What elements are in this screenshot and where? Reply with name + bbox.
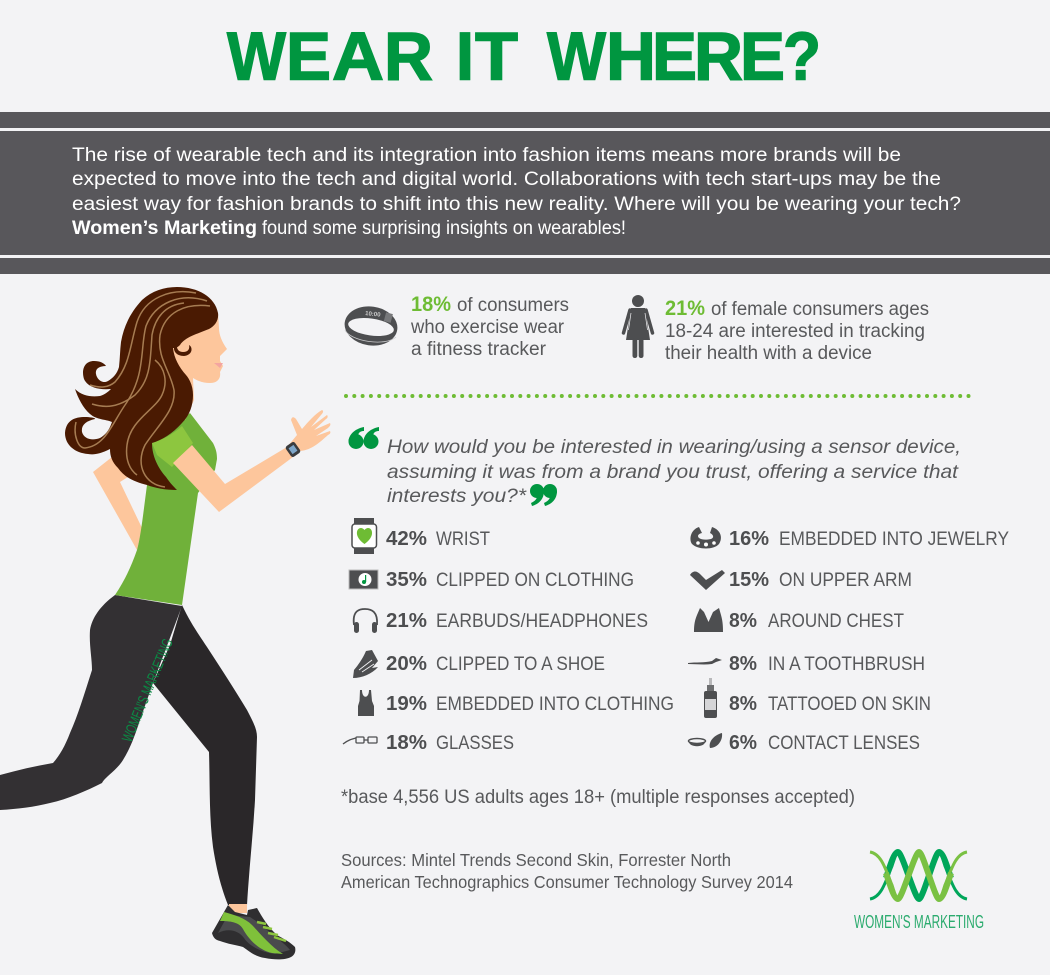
icon: glasses (343, 737, 377, 744)
survey question: How would you be interested in wearing/using a sensor device, (387, 437, 961, 458)
row: chest: AROUND CHEST (768, 610, 904, 632)
runner illustration (0, 287, 330, 959)
lips (214, 363, 223, 368)
icon: bracelet (690, 527, 721, 548)
intro text: easiest way for fashion brands to shift into this new reality. Where will you be wearing your tech? (72, 194, 961, 215)
sources: Sources: Mintel Trends Second Skin, Forrester North (341, 850, 731, 870)
back leg (0, 595, 182, 810)
row: contact lenses (688, 731, 920, 754)
intro text: The rise of wearable tech and its integration into fashion items means more brands will be (72, 145, 901, 166)
title: W (227, 18, 287, 94)
icon: fitness band (342, 303, 400, 349)
row: toothbrush: 8% (729, 652, 757, 675)
row: upper arm (690, 568, 912, 591)
title: I (456, 18, 474, 94)
row: embedded clothing (358, 690, 674, 716)
title (227, 18, 821, 94)
row: clipped on clothing: CLIPPED ON CLOTHING (436, 569, 634, 591)
intro band (0, 112, 1050, 274)
row: toothbrush: IN A TOOTHBRUSH (768, 653, 925, 675)
list: wearing locations, right column (688, 527, 1009, 754)
icon: lenses (688, 733, 722, 748)
logo: Women's Marketing: WOMEN'S MARKETING (854, 912, 984, 932)
survey question: assuming it was from a brand you trust, offering a service that (387, 462, 959, 483)
row: jewelry: 16% (729, 527, 769, 550)
icon: headphones (354, 609, 377, 633)
row: chest (694, 608, 904, 632)
row: toothbrush (688, 652, 925, 675)
row: glasses: GLASSES (436, 732, 514, 754)
hair (65, 287, 218, 490)
ear curl (174, 341, 192, 356)
title: A (332, 18, 384, 94)
footnote: *base 4,556 US adults ages 18+ (multiple responses accepted) (341, 787, 855, 808)
icon: closing quote (530, 484, 557, 506)
row: clipped on clothing: 35% (386, 568, 427, 591)
stat: female consumers: 18-24 are interested in tracking (665, 321, 925, 342)
leg brand text: WOMEN'S MARKETING (119, 636, 177, 745)
stat: fitness tracker: of consumers (457, 295, 569, 316)
row: wrist: WRIST (436, 528, 490, 550)
row: tattoo: TATTOOED ON SKIN (768, 693, 931, 715)
row: shoe: 20% (386, 652, 427, 675)
row: tattoo: 8% (729, 692, 757, 715)
row: earbuds: 21% (386, 609, 427, 632)
stat: fitness tracker: who exercise wear (410, 317, 565, 338)
icon: sports bra (694, 608, 723, 632)
sources: American Technographics Consumer Technology Survey 2014 (341, 872, 793, 892)
row: contact lenses: CONTACT LENSES (768, 732, 920, 754)
row: glasses: 18% (386, 731, 427, 754)
row: shoe (353, 650, 605, 678)
row: wrist (352, 518, 490, 554)
title: H (606, 18, 656, 94)
front arm (173, 445, 293, 512)
row: upper arm: ON UPPER ARM (779, 569, 912, 591)
stat: female consumers: of female consumers ages (711, 299, 929, 320)
row: contact lenses: 6% (729, 731, 757, 754)
row: jewelry: EMBEDDED INTO JEWELRY (779, 528, 1009, 550)
ankle (229, 904, 247, 913)
row: glasses (343, 731, 514, 754)
survey question (348, 427, 961, 507)
shirt (115, 413, 217, 605)
face and neck (165, 310, 227, 420)
smartwatch (285, 441, 301, 458)
stat: female consumers (624, 295, 929, 364)
stat: female consumers: their health with a device (665, 343, 872, 364)
list: wearing locations, left column (343, 518, 674, 754)
row: earbuds (354, 609, 648, 633)
title: E (740, 18, 785, 94)
row: chest: 8% (729, 609, 757, 632)
stat: female consumers: 21% (665, 297, 705, 320)
front leg (153, 605, 257, 905)
title: W (547, 18, 607, 94)
icon: music clip (349, 570, 378, 589)
survey question: interests you?* (387, 486, 527, 507)
icon: smartwatch (352, 518, 376, 554)
title: R (384, 18, 433, 94)
title: E (286, 18, 331, 94)
hair highlights (75, 292, 210, 487)
icon: fitness band: 10:00 (365, 311, 381, 319)
stat: fitness tracker (342, 293, 569, 360)
row: embedded clothing: EMBEDDED INTO CLOTHING (436, 693, 674, 715)
icon: woman (624, 295, 652, 358)
icon: ink bottle (704, 678, 717, 718)
intro text (72, 145, 961, 239)
title: ? (783, 18, 821, 94)
title: R (694, 18, 743, 94)
icon: opening quote (348, 427, 379, 449)
sources (341, 850, 793, 892)
logo: Women's Marketing (854, 852, 984, 932)
intro text: found some surprising insights on wearables! (262, 218, 626, 239)
title: E (652, 18, 697, 94)
icon: sneaker (353, 650, 378, 678)
stat: fitness tracker: 18% (411, 293, 451, 316)
row: jewelry (690, 527, 1009, 550)
row: tattoo (704, 678, 931, 718)
row: embedded clothing: 19% (386, 692, 427, 715)
sleeve (152, 426, 193, 467)
row: shoe: CLIPPED TO A SHOE (436, 653, 605, 675)
hand (287, 410, 330, 457)
icon: tank top (358, 690, 374, 716)
row: earbuds: EARBUDS/HEADPHONES (436, 610, 648, 632)
row: clipped on clothing (349, 568, 634, 591)
title: T (475, 18, 518, 94)
icon: toothbrush (688, 658, 722, 664)
icon: arm (690, 570, 725, 590)
stat: fitness tracker: a fitness tracker (411, 339, 547, 360)
shoe (212, 905, 295, 959)
intro text: Women’s Marketing (72, 218, 257, 239)
back arm (93, 457, 142, 550)
row: upper arm: 15% (729, 568, 769, 591)
intro text: expected to move into the tech and digital world. Collaborations with tech start-ups may be the (72, 169, 941, 190)
row: wrist: 42% (386, 527, 427, 550)
